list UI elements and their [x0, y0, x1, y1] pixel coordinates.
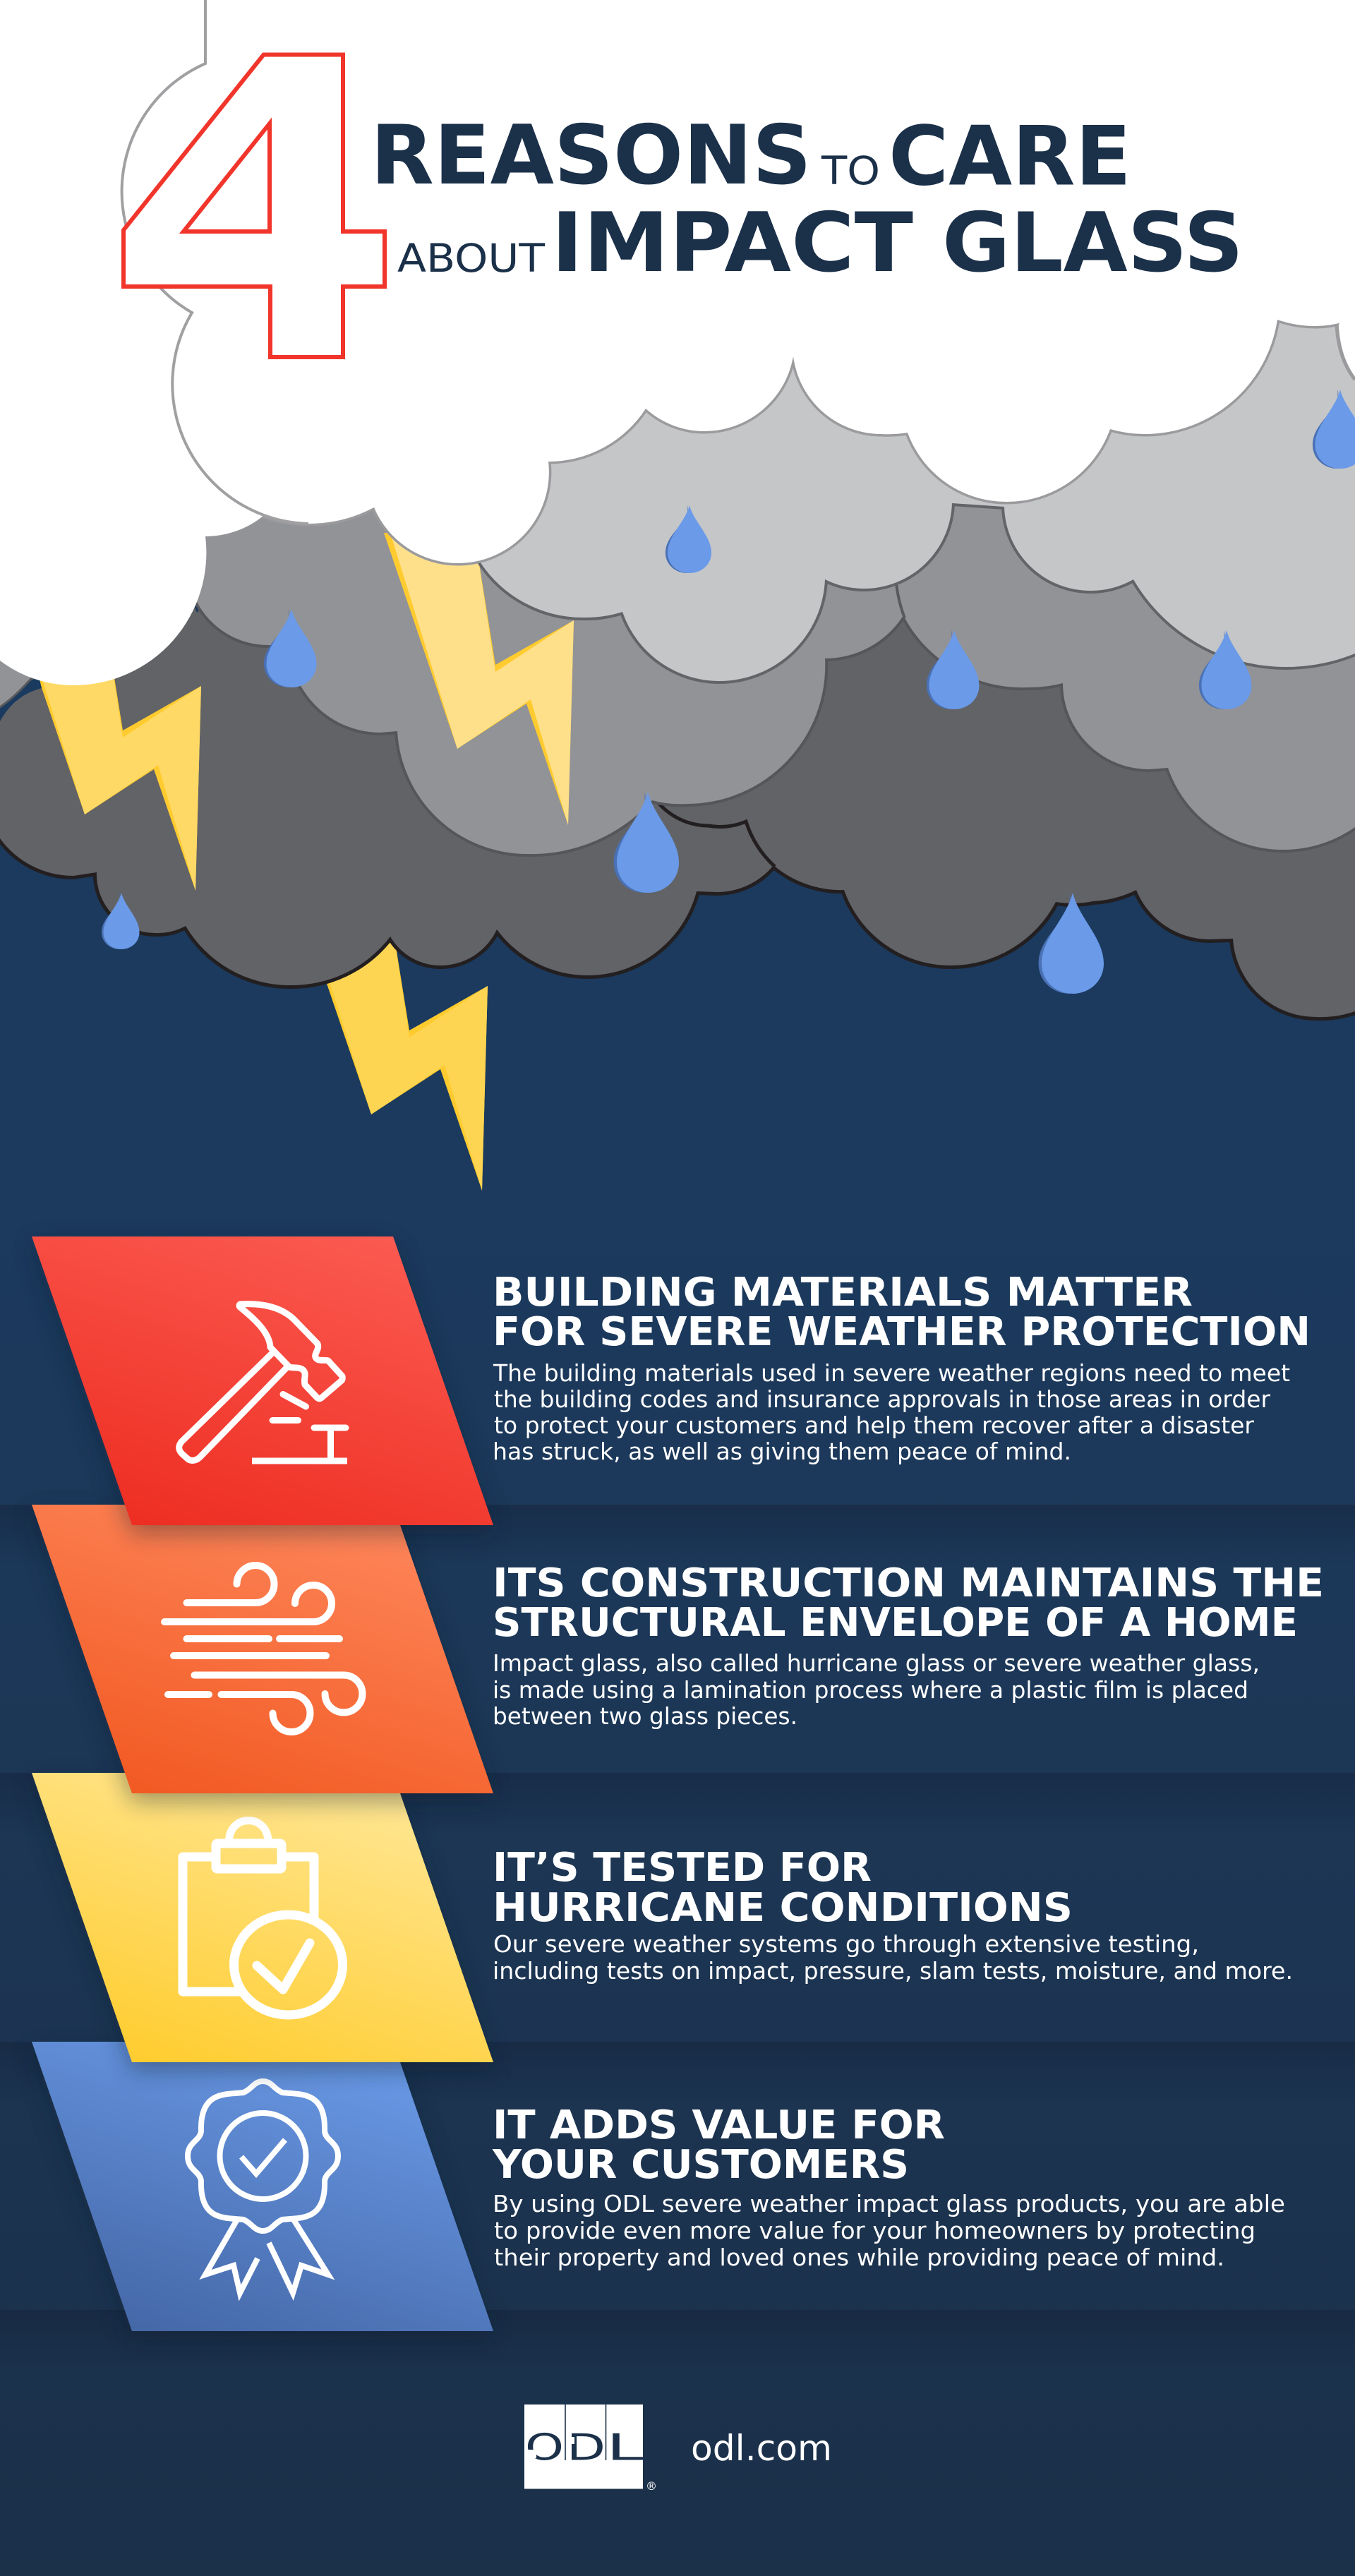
drop 6	[102, 893, 140, 949]
icon: wind	[164, 1565, 363, 1732]
panel 1: building materials	[32, 1236, 1311, 1534]
text 3	[493, 1845, 1293, 1985]
text 1: FOR SEVERE WEATHER PROTECTION	[493, 1309, 1311, 1355]
footer logo: D	[567, 2426, 606, 2469]
card 3	[32, 1773, 493, 2071]
text 3: HURRICANE CONDITIONS	[493, 1885, 1073, 1931]
row shading bands	[0, 1505, 1355, 2373]
text 4	[492, 2102, 1285, 2271]
text 1: the building codes and insurance approvals in those areas in order	[494, 1385, 1270, 1413]
drop 8	[1313, 390, 1355, 469]
drop 2	[264, 609, 316, 687]
title: ABOUT	[397, 236, 545, 281]
text 2: ITS CONSTRUCTION MAINTAINS THE	[493, 1560, 1324, 1606]
text 2	[493, 1560, 1324, 1730]
lightning bolt: lower	[298, 898, 488, 1191]
footer url: odl.com	[691, 2428, 832, 2469]
footer logo: O	[525, 2426, 564, 2469]
text 3: IT’S TESTED FOR	[493, 1845, 872, 1891]
text 1: The building materials used in severe weather regions need to meet	[493, 1359, 1290, 1387]
drop 4	[1199, 630, 1252, 709]
cloud sliver: far left	[0, 656, 42, 721]
drop 5	[614, 792, 679, 893]
card 4	[32, 2042, 493, 2340]
footer logo	[524, 2405, 657, 2493]
cloud layer: mid grey	[0, 0, 1355, 854]
title: CARE	[889, 109, 1131, 205]
footer logo: L	[606, 2426, 644, 2469]
cloud layer: white top	[0, 0, 1355, 685]
drop 1	[666, 505, 711, 573]
drop 7	[1039, 893, 1104, 994]
title: GLASS	[942, 195, 1243, 291]
panel 2: construction	[32, 1505, 1324, 1802]
title: IMPACT	[551, 195, 913, 291]
text 1	[493, 1270, 1311, 1465]
text 2: STRUCTURAL ENVELOPE OF A HOME	[493, 1600, 1298, 1646]
text 2: Impact glass, also called hurricane glass or severe weather glass,	[493, 1649, 1260, 1677]
cloud layer: darkest	[0, 0, 1355, 1017]
panel 3: tested	[32, 1773, 1293, 2071]
icon: clipboard check	[183, 1821, 343, 2015]
text 1: to protect your customers and help them recover after a disaster	[494, 1412, 1254, 1439]
text 3: including tests on impact, pressure, slam tests, moisture, and more.	[493, 1957, 1293, 1985]
rain drops	[102, 390, 1355, 994]
text 2: is made using a lamination process where a plastic film is placed	[493, 1676, 1248, 1704]
cloud layer: light grey	[423, 0, 1355, 681]
title: TO	[821, 148, 880, 193]
text 4: IT ADDS VALUE FOR	[493, 2102, 945, 2148]
icon: ribbon badge	[188, 2081, 338, 2293]
card 1	[32, 1236, 493, 1534]
text 4: By using ODL severe weather impact glass products, you are able	[493, 2190, 1285, 2217]
title numeral 4	[124, 55, 385, 357]
card 2	[32, 1505, 493, 1802]
lightning bolt: left	[11, 598, 201, 891]
footer logo: ®	[646, 2479, 657, 2493]
text 4: YOUR CUSTOMERS	[492, 2142, 909, 2188]
lightning bolt: upper pale	[384, 533, 574, 825]
text 4: their property and loved ones while providing peace of mind.	[494, 2244, 1224, 2271]
title: REASONS	[371, 108, 812, 203]
text 1: BUILDING MATERIALS MATTER	[493, 1270, 1193, 1316]
drop 3	[927, 630, 980, 709]
text 1: has struck, as well as giving them peace of mind.	[493, 1438, 1071, 1465]
text 2: between two glass pieces.	[493, 1702, 797, 1730]
icon: hammer and nail	[179, 1304, 347, 1461]
text 3: Our severe weather systems go through extensive testing,	[493, 1930, 1199, 1958]
text 4: to provide even more value for your homeowners by protecting	[494, 2217, 1255, 2244]
panel 4: added value	[32, 2042, 1285, 2340]
title	[371, 108, 1243, 291]
